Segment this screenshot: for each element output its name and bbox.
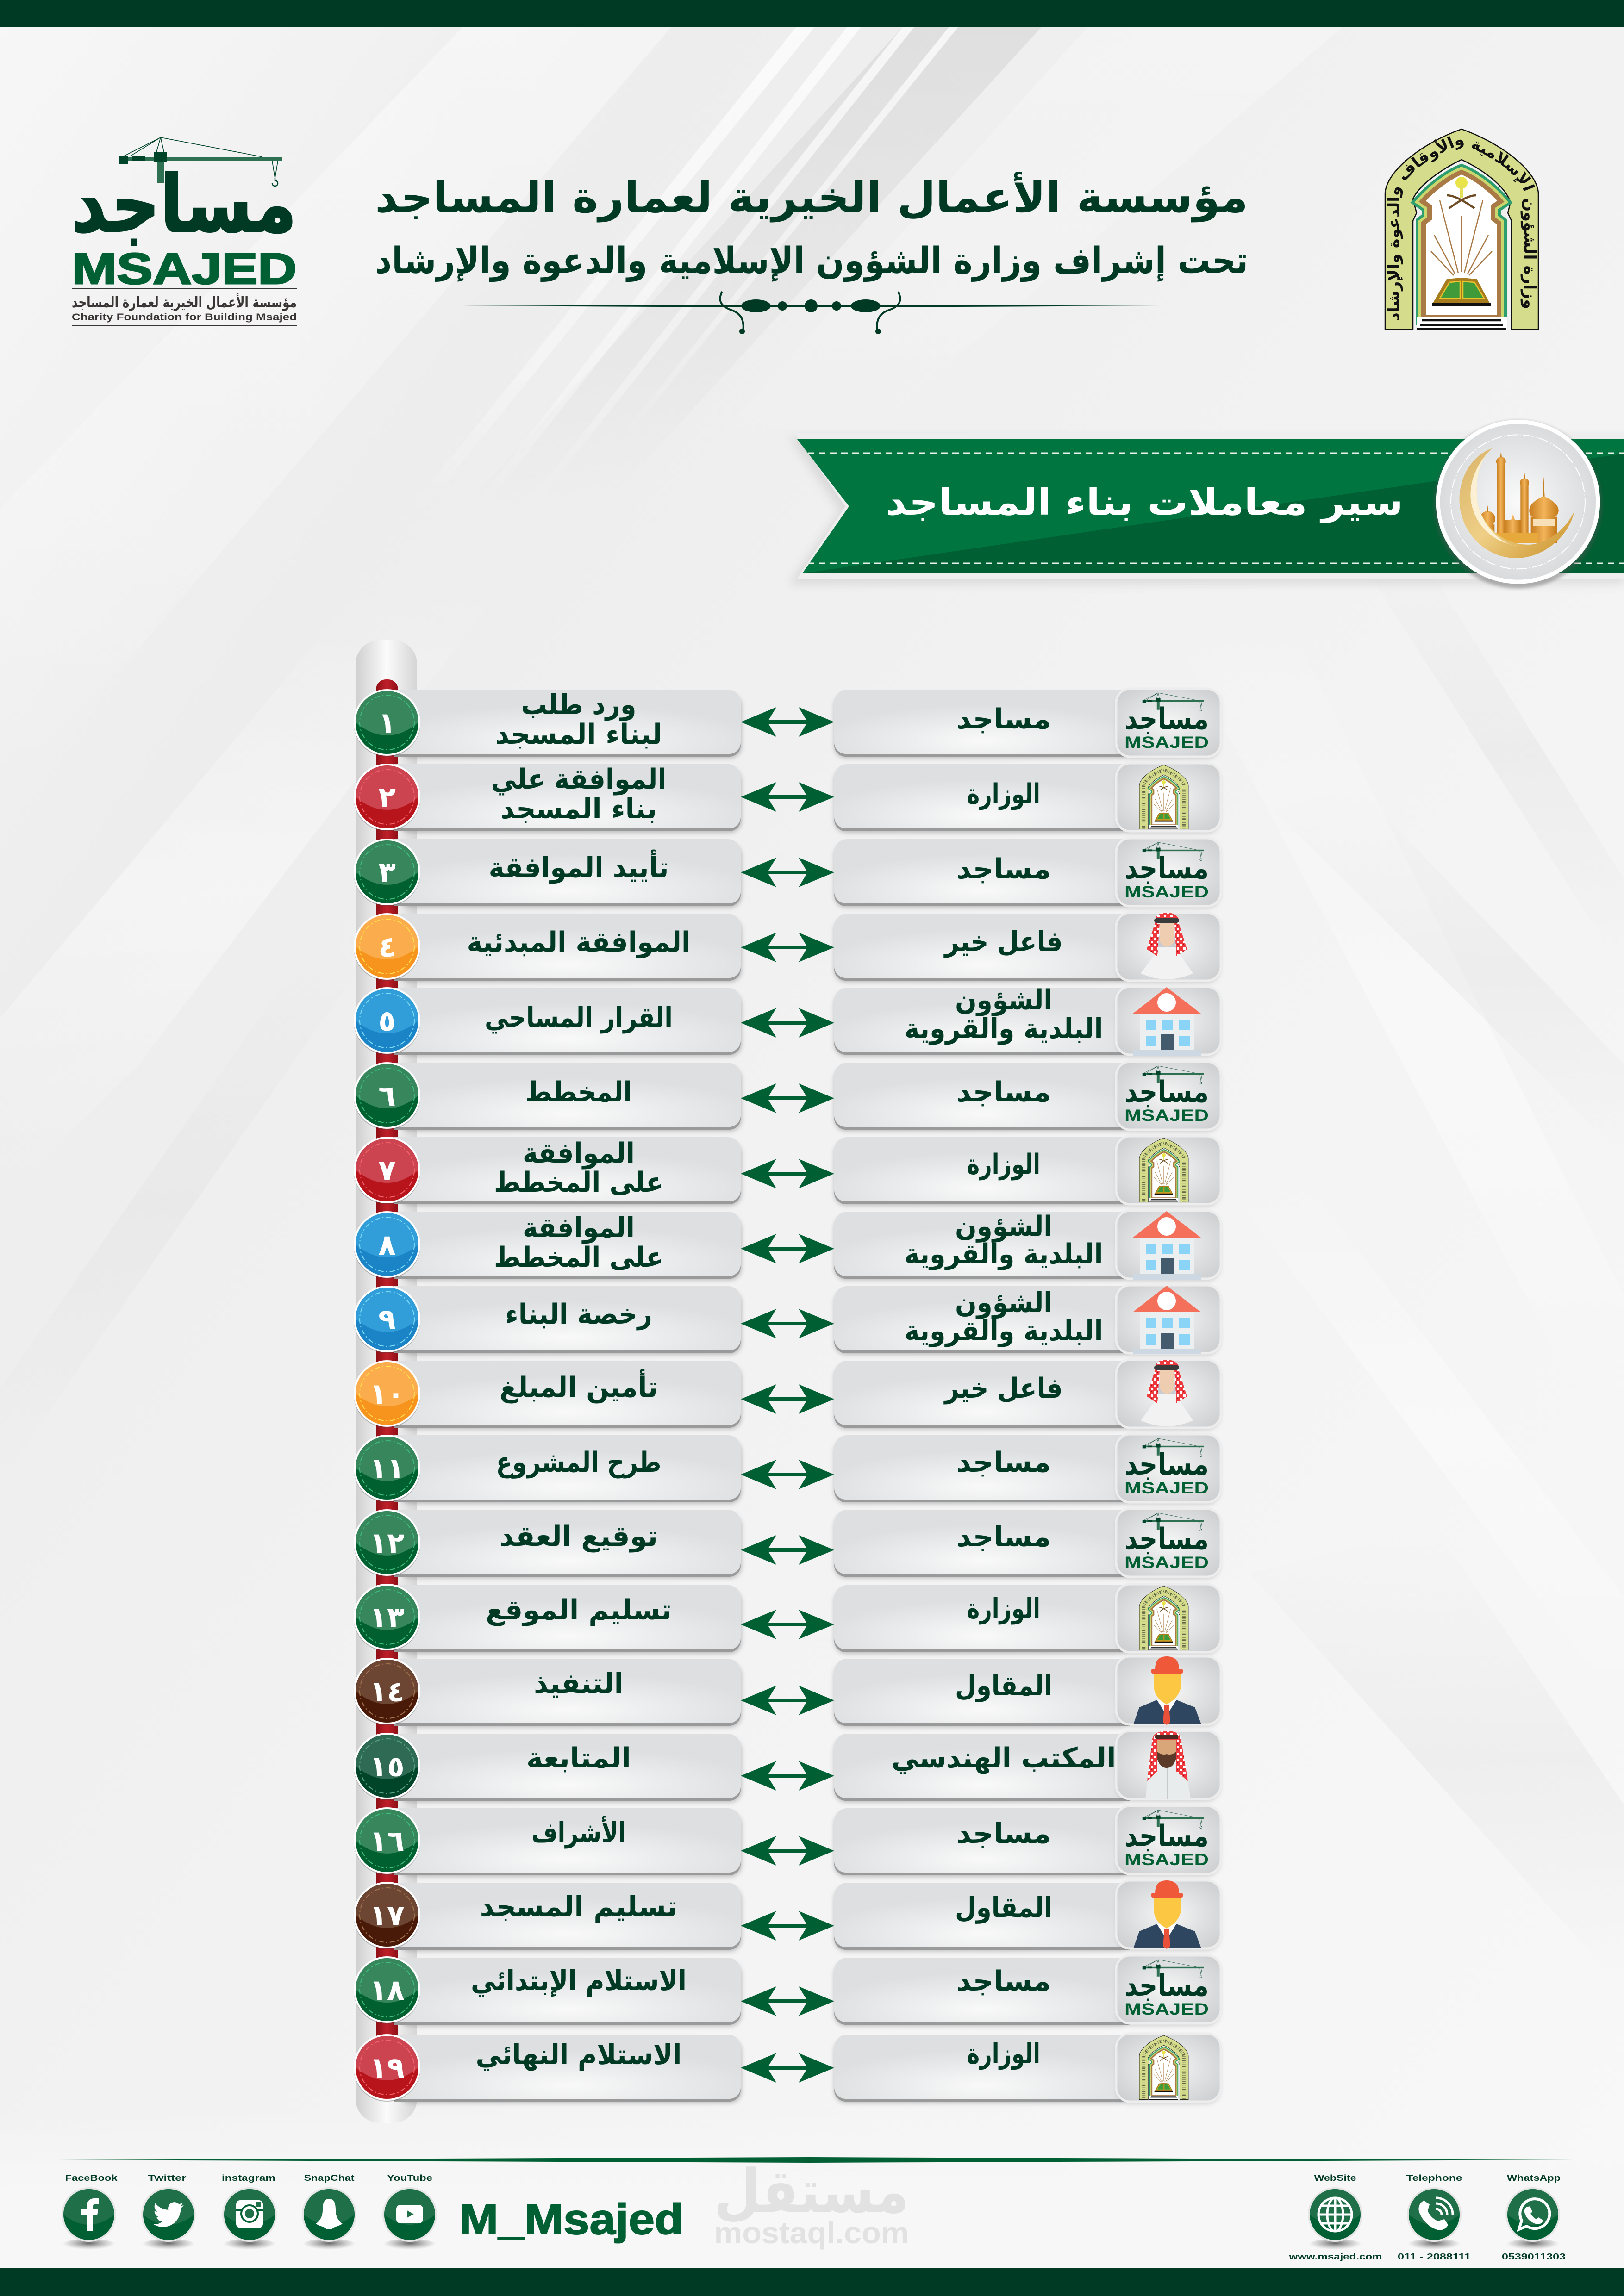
row 8 — [354, 1210, 1221, 1281]
step text: لبناء المسجد — [495, 718, 662, 751]
watermark — [714, 2156, 909, 2250]
actor text: البلدية والقروية — [905, 1013, 1103, 1045]
row 14 — [354, 1656, 1221, 1727]
row 12 — [354, 1509, 1221, 1579]
step text: الأشراف — [531, 1816, 626, 1849]
actor text: المكتب الهندسي — [892, 1742, 1116, 1774]
number badge: ٧ — [378, 1153, 396, 1187]
row 3 — [354, 838, 1221, 908]
number badge: ١١ — [369, 1451, 405, 1485]
actor icon: contractor — [1116, 1656, 1221, 1727]
number badge: ٦ — [378, 1079, 396, 1113]
number badge — [354, 689, 420, 757]
arrow — [741, 1384, 834, 1414]
number badge: ١٤ — [369, 1674, 405, 1708]
step text: تأييد الموافقة — [489, 849, 668, 884]
title line 1: مؤسسة الأعمال الخيرية لعمارة المساجد — [375, 172, 1248, 223]
actor icon: Msajed: مساجد — [1124, 1522, 1209, 1556]
contact: website: www.msajed.com — [1288, 2252, 1382, 2261]
icon: crescent and mosque — [1434, 420, 1602, 589]
panel: step — [394, 1137, 742, 1206]
emblem: ministry — [1384, 129, 1539, 330]
row 5 — [354, 984, 1221, 1057]
arrow — [741, 1761, 834, 1791]
actor text: الوزارة — [967, 1148, 1040, 1181]
actor text: الوزارة — [967, 1593, 1040, 1625]
ornament divider — [463, 292, 1160, 334]
panel: actor — [834, 1212, 1131, 1280]
panel: step — [394, 988, 742, 1056]
step text — [494, 1137, 663, 1199]
social: instagram — [222, 2173, 277, 2252]
logo word arabic: مساجد — [72, 159, 297, 250]
arrow — [741, 1083, 834, 1113]
number badge: ٣ — [378, 855, 396, 889]
number badge — [354, 1137, 420, 1204]
actor text: الشؤون — [955, 1287, 1052, 1319]
emblem calligraphy: وزارة الشؤون الإسلامية والأوقاف والدعوة والإرشاد — [1384, 130, 1539, 321]
arrow — [741, 1535, 834, 1565]
number badge: ١٠ — [369, 1377, 405, 1411]
panel: actor — [834, 2035, 1131, 2103]
arrow — [741, 707, 834, 737]
banner — [789, 420, 1624, 589]
step text: الاستلام النهائي — [476, 2039, 681, 2071]
actor text: الشؤون — [955, 984, 1052, 1016]
actor icon: Msajed: مساجد — [1124, 1448, 1209, 1482]
actor icon: Msajed — [1116, 1955, 1221, 2026]
panel: actor — [834, 988, 1131, 1056]
number badge — [354, 913, 420, 981]
contact: telephone — [1398, 2173, 1471, 2261]
contact: telephone: 011 - 2088111 — [1398, 2252, 1471, 2261]
row 7 — [354, 1136, 1221, 1207]
panel: actor — [834, 1958, 1131, 2026]
actor text — [905, 1287, 1103, 1347]
actor text: المقاول — [955, 1892, 1052, 1924]
step text: تسليم المسجد — [480, 1891, 678, 1923]
actor icon: Msajed — [1116, 1806, 1221, 1876]
actor icon: Msajed: MSAJED — [1124, 1554, 1209, 1572]
actor text: فاعل خير — [943, 926, 1063, 958]
contact: whatsapp: 0539011303 — [1502, 2252, 1566, 2261]
actor icon: Msajed — [1116, 1434, 1221, 1505]
actor icon: ministry — [1116, 1136, 1221, 1207]
step text: التنفيذ — [534, 1668, 624, 1700]
number badge: ١٣ — [369, 1600, 405, 1634]
panel: step — [394, 764, 742, 833]
contact: whatsapp: WhatsApp — [1507, 2173, 1561, 2183]
arrow — [741, 1911, 834, 1941]
panel: step — [394, 1063, 742, 1131]
actor icon: Msajed — [1116, 1062, 1221, 1132]
panel: step — [394, 1212, 742, 1280]
actor icon: donor — [1116, 913, 1221, 983]
actor icon: Msajed: مساجد — [1124, 702, 1209, 736]
panel: actor — [834, 1137, 1131, 1206]
panel: step — [394, 1510, 742, 1578]
actor icon: Msajed: MSAJED — [1124, 1851, 1209, 1869]
arrow — [741, 1836, 834, 1866]
number badge: ١٦ — [369, 1824, 405, 1858]
row 10 — [354, 1360, 1221, 1430]
logo word latin: MSAJED — [72, 244, 297, 293]
number badge: ١ — [378, 706, 396, 740]
arrow — [741, 782, 834, 812]
step text: الموافقة — [523, 1212, 635, 1244]
actor text: مساجد — [956, 1817, 1051, 1850]
arrow — [741, 1309, 834, 1338]
timeline rail — [356, 640, 417, 2123]
panel: actor — [834, 1510, 1131, 1578]
arrow — [741, 1234, 834, 1263]
row 6 — [354, 1062, 1221, 1132]
step text: الموافقة المبدئية — [467, 926, 691, 958]
actor icon: Msajed — [1116, 689, 1221, 759]
logo english subtitle: Charity Foundation for Building Msajed — [72, 312, 297, 323]
number badge — [354, 1211, 420, 1279]
actor text: مساجد — [956, 1076, 1051, 1108]
number badge: ١٩ — [369, 2051, 405, 2084]
actor icon: Msajed: مساجد — [1124, 1819, 1209, 1854]
actor icon: engineering office — [1116, 1731, 1221, 1801]
actor icon: Msajed: MSAJED — [1124, 883, 1209, 901]
panel: actor — [834, 1063, 1131, 1131]
actor icon: Msajed: MSAJED — [1124, 734, 1209, 752]
panel: actor — [834, 1734, 1131, 1802]
panel: step — [394, 1958, 742, 2026]
row 13 — [354, 1584, 1221, 1655]
actor icon: ministry — [1116, 2034, 1221, 2104]
social: twitter: Twitter — [148, 2173, 186, 2183]
actor icon: donor — [1116, 1360, 1221, 1430]
arrow — [741, 1008, 834, 1038]
number badge — [354, 1882, 420, 1949]
row 18 — [354, 1955, 1221, 2026]
actor icon: municipality — [1116, 987, 1221, 1057]
arrow — [741, 2053, 834, 2083]
step text: الموافقة — [523, 1137, 635, 1170]
number badge — [354, 764, 420, 831]
contact: telephone: Telephone — [1406, 2173, 1462, 2183]
social: facebook — [62, 2173, 118, 2252]
panel: actor — [834, 690, 1131, 758]
actor icon: Msajed: MSAJED — [1124, 1479, 1209, 1497]
actor icon: Msajed — [1116, 838, 1221, 908]
panel: step — [394, 1659, 742, 1727]
panel: actor — [834, 914, 1131, 982]
arrow — [741, 1610, 834, 1639]
step text: على المخطط — [494, 1166, 663, 1199]
footer handle: M_Msajed — [459, 2195, 683, 2243]
panel: step — [394, 1361, 742, 1429]
actor text — [905, 1210, 1103, 1270]
step text: طرح المشروع — [496, 1446, 661, 1479]
arrow — [741, 1686, 834, 1715]
step text: الاستلام الإبتدائي — [471, 1965, 687, 1997]
number badge — [354, 1807, 420, 1875]
number badge: ١٧ — [369, 1898, 405, 1932]
row 2 — [354, 763, 1221, 834]
row 11 — [354, 1434, 1221, 1505]
actor icon: municipality — [1116, 1285, 1221, 1356]
number badge: ٨ — [378, 1228, 396, 1262]
number badge — [354, 1658, 420, 1725]
contact: website — [1288, 2173, 1382, 2261]
actor text: الوزارة — [967, 778, 1040, 810]
actor text: مساجد — [956, 1446, 1051, 1479]
actor icon: Msajed: MSAJED — [1124, 1107, 1209, 1125]
actor text: مساجد — [956, 1521, 1051, 1553]
row 15 — [354, 1731, 1221, 1802]
actor icon: Msajed: مساجد — [1124, 852, 1209, 886]
row 19 — [354, 2034, 1221, 2104]
step text — [495, 689, 662, 751]
panel: step — [394, 690, 742, 758]
number badge: ١٨ — [369, 1973, 405, 2007]
number badge — [354, 1509, 420, 1577]
banner title: سير معاملات بناء المساجد — [886, 482, 1403, 523]
social: youtube: YouTube — [387, 2173, 432, 2183]
step text — [491, 763, 667, 825]
number badge — [354, 1062, 420, 1130]
number badge — [354, 839, 420, 906]
footer: social links — [62, 2173, 437, 2252]
actor icon: Msajed: MSAJED — [1124, 2000, 1209, 2018]
panel: actor — [834, 1659, 1131, 1727]
panel: actor — [834, 1808, 1131, 1877]
actor icon: contractor — [1116, 1880, 1221, 1951]
number badge — [354, 1286, 420, 1353]
number badge — [354, 2034, 420, 2102]
watermark: mostaql.com — [714, 2215, 909, 2250]
title line 2: تحت إشراف وزارة الشؤون الإسلامية والدعوة والإرشاد — [375, 240, 1248, 282]
contact: website: WebSite — [1314, 2173, 1356, 2183]
social: instagram: instagram — [222, 2173, 275, 2183]
social: snapchat: SnapChat — [304, 2173, 355, 2183]
actor icon: ministry — [1116, 1584, 1221, 1655]
step text — [494, 1212, 663, 1274]
row 9 — [354, 1285, 1221, 1356]
actor text: مساجد — [956, 853, 1051, 885]
number badge — [354, 1956, 420, 2024]
panel: actor — [834, 1883, 1131, 1951]
step text: القرار المساحي — [485, 1002, 673, 1034]
panel: actor — [834, 1585, 1131, 1654]
arrow — [741, 858, 834, 887]
actor text — [905, 984, 1103, 1045]
footer: contact links — [1288, 2173, 1566, 2261]
footer rule — [57, 2157, 1574, 2163]
actor icon: municipality — [1116, 1211, 1221, 1281]
arrow — [741, 1986, 834, 2016]
actor text: فاعل خير — [943, 1372, 1063, 1405]
row 1 — [354, 689, 1221, 759]
panel: step — [394, 1286, 742, 1355]
panel: step — [394, 1734, 742, 1802]
top bar — [0, 0, 1624, 27]
panel: actor — [834, 1361, 1131, 1429]
number badge: ١٢ — [369, 1526, 405, 1560]
panel: step — [394, 839, 742, 908]
row 4 — [354, 913, 1221, 983]
actor text: البلدية والقروية — [905, 1315, 1103, 1347]
panel: step — [394, 2035, 742, 2103]
step text: بناء المسجد — [500, 793, 657, 825]
actor icon: Msajed: مساجد — [1124, 1969, 1209, 2003]
logo arabic subtitle: مؤسسة الأعمال الخيرية لعمارة المساجد — [72, 293, 297, 311]
contact: whatsapp — [1502, 2173, 1566, 2261]
step text: رخصة البناء — [505, 1298, 652, 1331]
actor text: البلدية والقروية — [905, 1238, 1103, 1270]
number badge — [354, 987, 420, 1055]
social: facebook: FaceBook — [65, 2173, 118, 2183]
step text: تسليم الموقع — [486, 1594, 672, 1626]
row 17 — [354, 1880, 1221, 1951]
step text: المتابعة — [526, 1742, 631, 1774]
social: twitter — [141, 2173, 196, 2252]
number badge: ١٥ — [369, 1749, 405, 1783]
step text: تأمين المبلغ — [500, 1369, 658, 1404]
panel: step — [394, 1808, 742, 1877]
title — [375, 172, 1248, 334]
number badge — [354, 1584, 420, 1651]
panel: actor — [834, 764, 1131, 833]
panel: step — [394, 1435, 742, 1504]
panel: actor — [834, 1435, 1131, 1504]
panel: step — [394, 1585, 742, 1654]
watermark: مستقل — [714, 2156, 909, 2227]
panel: step — [394, 1883, 742, 1951]
arrow — [741, 933, 834, 962]
step text: الموافقة علي — [491, 763, 667, 796]
panel: actor — [834, 839, 1131, 908]
arrow — [741, 1159, 834, 1188]
row 16 — [354, 1806, 1221, 1877]
social: youtube — [382, 2173, 437, 2252]
actor icon: Msajed: مساجد — [1124, 1075, 1209, 1109]
number badge — [354, 1733, 420, 1800]
number badge: ٥ — [378, 1004, 396, 1038]
actor text: الوزارة — [967, 2038, 1040, 2070]
number badge: ٤ — [378, 930, 396, 964]
number badge — [354, 1435, 420, 1502]
step text: توقيع العقد — [500, 1520, 658, 1553]
step text: على المخطط — [494, 1241, 663, 1274]
number badge: ٢ — [378, 780, 396, 814]
number badge — [354, 1360, 420, 1428]
arrow — [741, 1460, 834, 1489]
number badge: ٩ — [378, 1302, 396, 1336]
actor text: مساجد — [956, 703, 1051, 735]
actor text: مساجد — [956, 1965, 1051, 1997]
actor text: المقاول — [955, 1670, 1052, 1702]
actor icon: Msajed — [1116, 1509, 1221, 1579]
bottom bar — [0, 2268, 1624, 2296]
step text: ورد طلب — [521, 689, 636, 721]
panel: step — [394, 914, 742, 982]
icon: crane — [119, 137, 282, 186]
step text: المخطط — [525, 1076, 632, 1108]
social: snapchat — [302, 2173, 356, 2252]
actor icon: ministry — [1116, 763, 1221, 834]
actor text: الشؤون — [955, 1210, 1052, 1243]
logo: Msajed — [72, 137, 297, 326]
panel: actor — [834, 1286, 1131, 1355]
